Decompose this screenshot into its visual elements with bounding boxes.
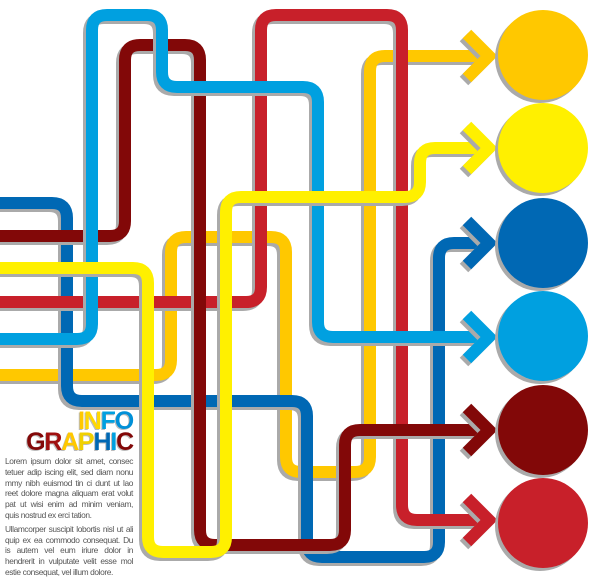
text block: estie consequat, vel illum dolore. [5, 567, 113, 577]
pipe: dark blue [0, 203, 489, 560]
body text: mmy nibh euismod tin ci dunt ut lao [5, 478, 133, 488]
circles [495, 10, 588, 571]
text block: quip ex ea commodo consequat. Du [5, 535, 133, 545]
pipe: yellow [0, 126, 489, 555]
text block [5, 407, 134, 577]
text block: hendrerit in vulputate velit esse mol [5, 556, 133, 566]
body text: reet dolore magna aliquam erat volut [5, 488, 133, 498]
title: GRAPHIC [26, 428, 133, 456]
body text: Lorem ipsum dolor sit amet, consec [5, 456, 133, 466]
pipe: dark red [0, 45, 489, 548]
text block: is autem vel eum iriure dolor in [5, 545, 133, 555]
pipe: orange [0, 34, 489, 475]
body text: tetuer adip iscing elit, sed diam nonu [5, 467, 133, 477]
body text [5, 456, 134, 520]
title: INFO [78, 407, 133, 435]
title [26, 407, 134, 456]
text block: Ullamcorper suscipit lobortis nisl ut ali [5, 524, 133, 534]
pipe: red [0, 15, 489, 545]
pipe: light blue [0, 15, 489, 362]
body text: quis nostrud ex erci tation. [5, 510, 92, 520]
body text: pat ut wisi enim ad minim veniam, [5, 499, 133, 509]
